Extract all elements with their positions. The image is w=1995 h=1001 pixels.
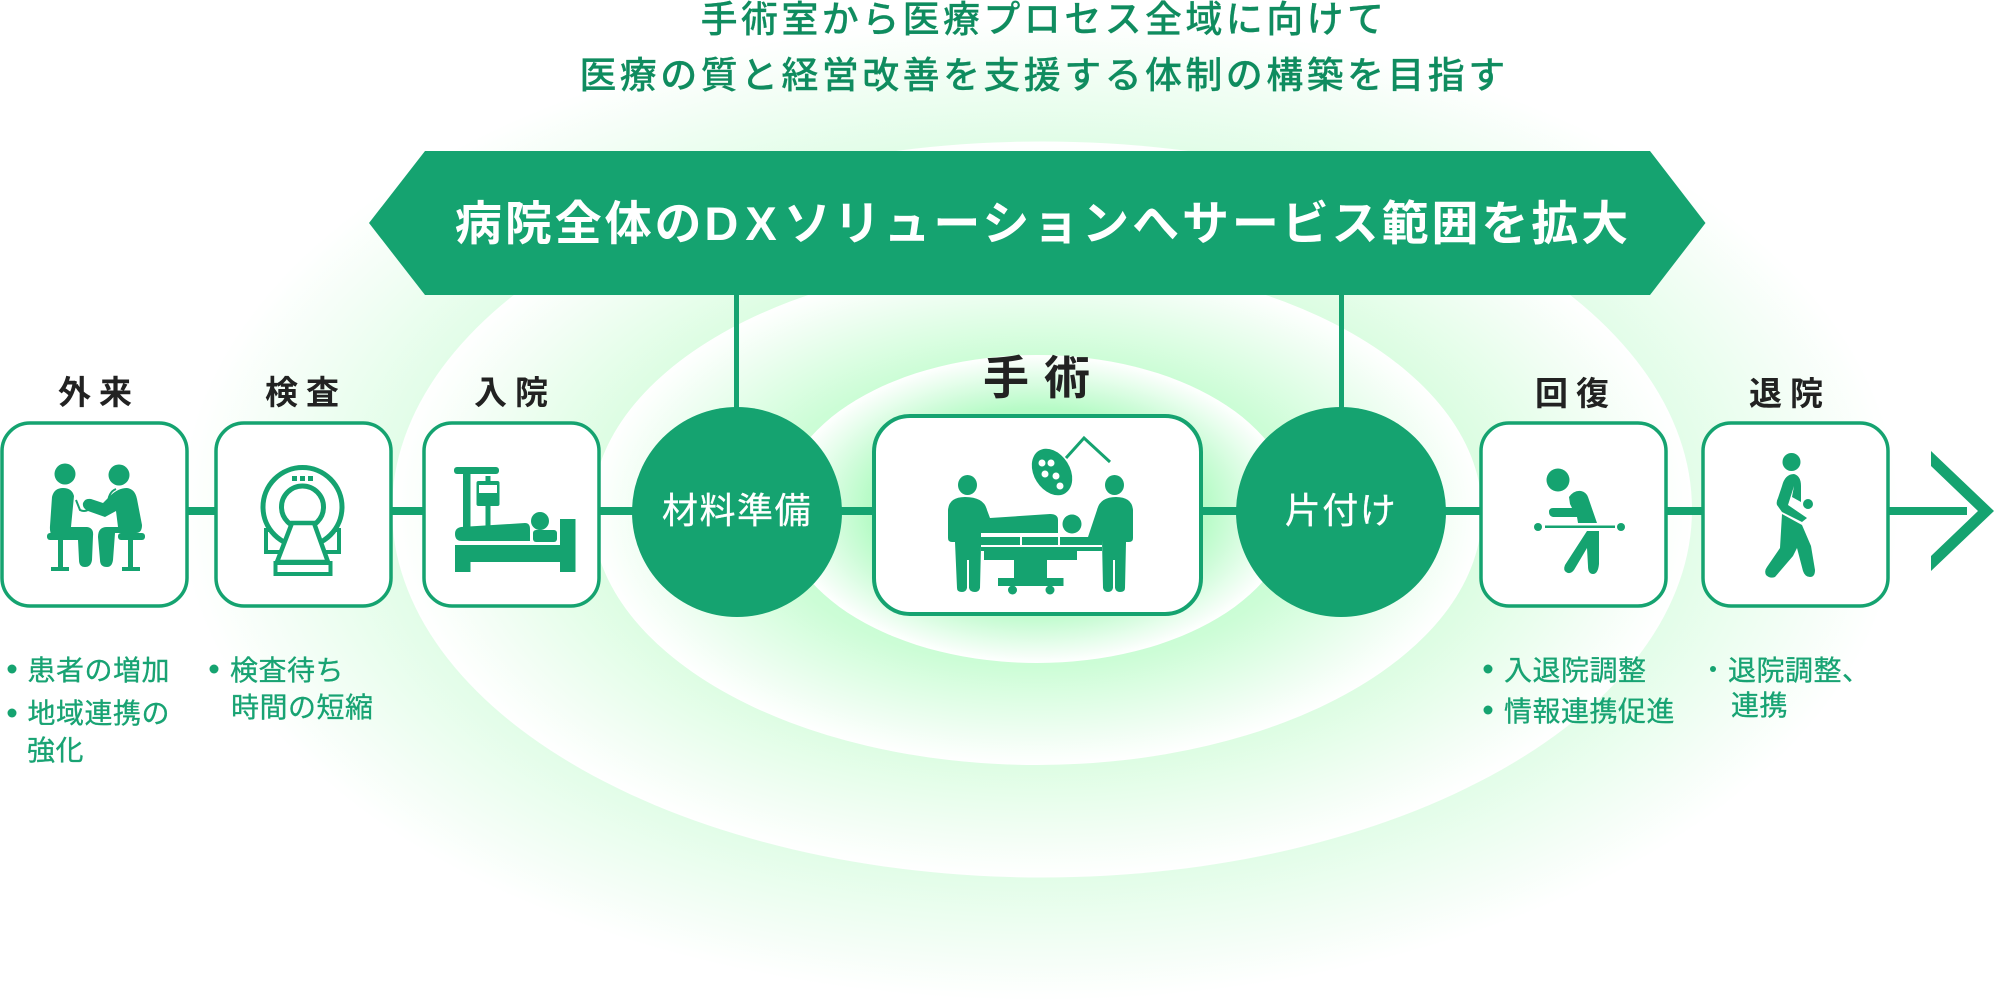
list: discharge benefits: 連携 bbox=[1731, 690, 1788, 721]
card: recovery bbox=[1481, 423, 1666, 606]
connector lines bbox=[187, 290, 1967, 515]
banner: hospital-wide DX bbox=[369, 151, 1706, 295]
arrow bbox=[1888, 451, 1994, 571]
card: discharge bbox=[1703, 423, 1888, 606]
label: examination: 検査 bbox=[265, 374, 347, 411]
icon: walking person bbox=[1765, 453, 1815, 578]
label: admission: 入院 bbox=[474, 374, 556, 411]
list: recovery benefits: 入退院調整 bbox=[1504, 655, 1647, 686]
list: outpatient benefits: 地域連携の bbox=[28, 698, 170, 729]
heading text: 医療の質と経営改善を支援する体制の構築を目指す bbox=[579, 55, 1509, 96]
label: recovery: 回復 bbox=[1535, 375, 1617, 412]
list: discharge benefits: 退院調整、 bbox=[1728, 655, 1871, 686]
card: surgery bbox=[874, 416, 1201, 614]
label: outpatient: 外来 bbox=[58, 374, 140, 411]
step: outpatient bbox=[2, 374, 187, 606]
heading text: 手術室から医療プロセス全域に向けて bbox=[701, 0, 1387, 40]
list: recovery benefits: 情報連携促進 bbox=[1504, 696, 1675, 727]
label: discharge: 退院 bbox=[1749, 375, 1831, 412]
step: surgery bbox=[874, 352, 1201, 614]
step: discharge bbox=[1703, 375, 1888, 606]
icon: CT scanner bbox=[263, 468, 342, 574]
node: cleanup bbox=[1236, 407, 1446, 617]
step: examination bbox=[216, 374, 391, 606]
list: outpatient benefits bbox=[8, 655, 170, 766]
banner: hospital-wide DX: 病院全体のDXソリューションへサービス範囲を拡大 bbox=[455, 197, 1631, 250]
list: discharge benefits bbox=[1710, 655, 1871, 721]
list: examination benefits: 時間の短縮 bbox=[231, 692, 374, 723]
label: surgery: 手術 bbox=[983, 352, 1105, 404]
card: examination bbox=[216, 423, 391, 606]
card: outpatient bbox=[2, 423, 187, 606]
list: recovery benefits bbox=[1484, 655, 1675, 727]
icon: hospital bed bbox=[454, 467, 576, 572]
list: examination benefits bbox=[210, 655, 374, 723]
icon: rehabilitation walking bbox=[1534, 468, 1625, 574]
list: examination benefits: 検査待ち bbox=[230, 655, 344, 686]
node: material preparation bbox=[632, 407, 842, 617]
icon: operating room bbox=[948, 438, 1133, 594]
node: material preparation: 材料準備 bbox=[662, 490, 812, 531]
heading text bbox=[579, 0, 1509, 96]
step: recovery bbox=[1481, 375, 1666, 606]
list: outpatient benefits: 患者の増加 bbox=[28, 655, 170, 686]
node: cleanup: 片付け bbox=[1285, 490, 1397, 531]
list: outpatient benefits: 強化 bbox=[27, 735, 84, 766]
icon: doctor and patient bbox=[47, 464, 145, 571]
step: admission bbox=[424, 374, 599, 606]
card: admission bbox=[424, 423, 599, 606]
